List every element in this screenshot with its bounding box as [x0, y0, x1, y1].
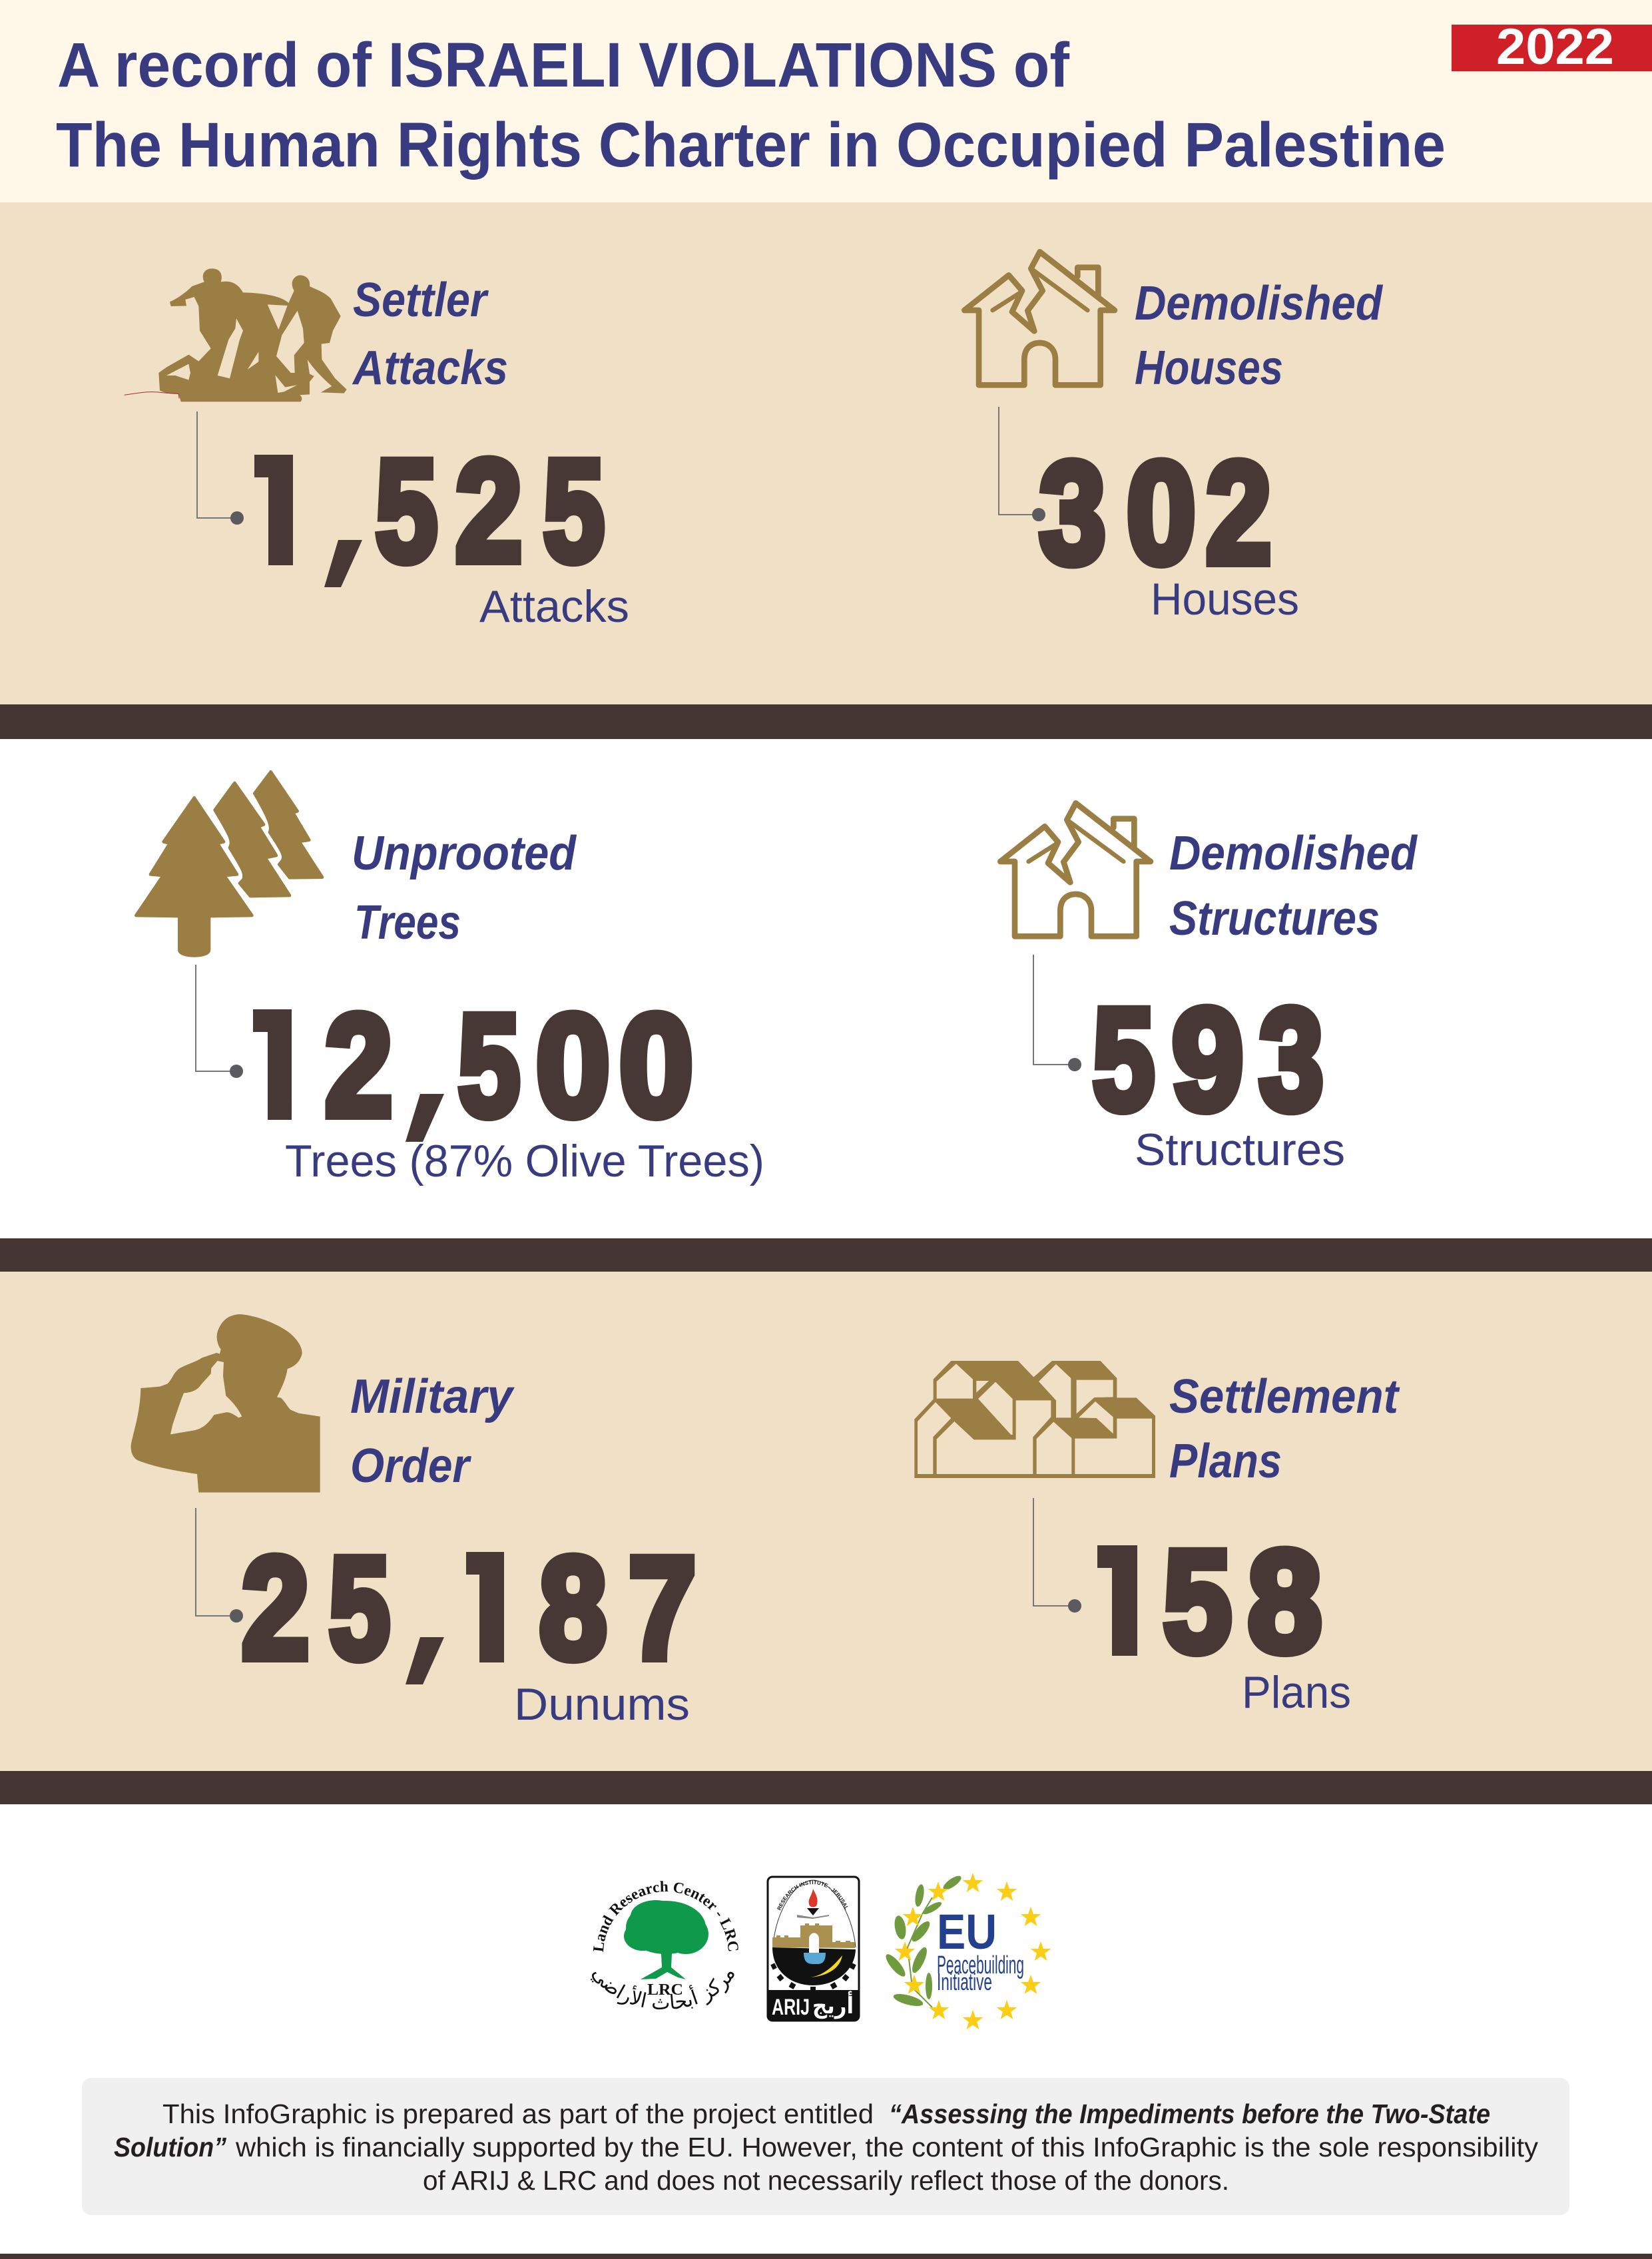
label: Military Order [350, 1370, 515, 1493]
laurel [883, 1874, 964, 2009]
number: attacks: 5 [543, 430, 605, 591]
number: houses [1039, 432, 1271, 594]
number: houses: 0 [1127, 432, 1196, 593]
number: trees [253, 985, 693, 1146]
number: trees: 0 [619, 985, 693, 1146]
disclaimer box: This InfoGraphic is prepared as part of the project entitled [162, 2099, 874, 2129]
number: dunums: , [412, 1595, 432, 1677]
logo: Land Research Center [590, 1881, 738, 2009]
logo: Land Research Center: Land Research Center - LRC [593, 1881, 738, 1952]
logo: Land Research Center: LRC [647, 1981, 683, 1999]
label: Demolished Houses: Houses [1135, 342, 1283, 395]
icon: demolished house [964, 252, 1115, 385]
unit: structures: Structures [1135, 1125, 1345, 1175]
label: Demolished Structures [1169, 827, 1418, 945]
unit: plans: Plans [1242, 1667, 1351, 1718]
gear [772, 1947, 856, 1985]
unit: attacks: Attacks [479, 581, 629, 632]
label: Settlement Plans: Plans [1169, 1435, 1282, 1488]
stars [895, 1873, 1051, 2029]
panel: row 1 [0, 202, 1652, 704]
number: trees: 2 [325, 985, 392, 1146]
number: attacks: 2 [455, 430, 522, 592]
number: dunums: 2 [242, 1528, 309, 1689]
connector [196, 965, 243, 1078]
number: structures [1093, 978, 1324, 1140]
logo: EU Peacebuilding Initiative [883, 1873, 1051, 2029]
number: dunums: 5 [329, 1527, 390, 1688]
logo: ARIJ: APPLIED RESEARCH INSTITUTE - JERUSALEM (ARIJ) [777, 1880, 848, 1911]
disclaimer box: “Assessing the Impediments before the Two-State [889, 2099, 1490, 2129]
icon: demolished structure [1000, 803, 1151, 936]
number: attacks [254, 430, 605, 592]
label: Demolished Houses: Demolished [1135, 277, 1384, 330]
unit: trees: Trees (87% Olive Trees) [285, 1136, 764, 1186]
icon: settlement houses [914, 1361, 1155, 1478]
title [56, 30, 1446, 180]
divider band 3 [0, 1771, 1652, 1804]
castle [772, 1923, 855, 1948]
divider band 1 [0, 704, 1652, 739]
icon: saluting soldier [131, 1314, 320, 1493]
icon: trees [136, 772, 322, 955]
title: The Human Rights Charter in Occupied Palestine [56, 110, 1446, 180]
number: plans: 5 [1163, 1521, 1232, 1682]
number: attacks: , [331, 497, 352, 579]
year badge [1452, 19, 1652, 75]
panel: row 2 [136, 772, 1418, 1186]
number: houses: 2 [1206, 432, 1271, 593]
number: dunums: 7 [629, 1528, 696, 1689]
logo: EU Peacebuilding Initiative: EU [937, 1904, 997, 1959]
wheat [810, 1955, 842, 1977]
title: A record of ISRAELI VIOLATIONS of [57, 30, 1069, 101]
label: Military Order: Order [350, 1439, 472, 1493]
label: Demolished Structures: Structures [1169, 892, 1380, 945]
number: dunums: 1 [478, 1537, 505, 1686]
number: houses: 3 [1039, 433, 1106, 594]
number: structures: 3 [1259, 978, 1324, 1140]
number: dunums: 8 [539, 1528, 607, 1689]
logo: EU Peacebuilding Initiative: Peacebuilding [937, 1951, 1024, 1979]
number: plans: 1 [1111, 1530, 1137, 1679]
number: structures: 5 [1093, 979, 1155, 1140]
label: Military Order: Military [350, 1370, 515, 1423]
number: plans: 8 [1248, 1521, 1322, 1682]
tree [624, 1900, 708, 1979]
number: attacks: 5 [376, 431, 437, 592]
number: trees: 5 [458, 985, 520, 1146]
unit: dunums: Dunums [514, 1679, 690, 1730]
number: plans [1097, 1521, 1322, 1682]
label: Unprooted Trees: Unprooted [352, 827, 577, 880]
logo: ARIJ: ARIJ [772, 1995, 810, 2020]
number: trees: , [412, 1052, 432, 1134]
connector [196, 1508, 243, 1623]
label: Unprooted Trees [352, 827, 577, 949]
label: Settlement Plans [1169, 1370, 1400, 1488]
label: Settler Attacks: Settler [353, 274, 489, 327]
disclaimer box: Solution” [114, 2132, 226, 2162]
year badge: 2022 [1496, 19, 1614, 75]
label: Demolished Houses [1135, 277, 1384, 395]
header panel [0, 0, 1652, 202]
number: attacks: 1 [267, 439, 294, 589]
icon: settler attack silhouettes [125, 268, 347, 401]
panel: row 3 [0, 1272, 1652, 1771]
connector [999, 407, 1045, 521]
number: trees: 0 [536, 985, 610, 1146]
logo: ARIJ [767, 1876, 860, 2021]
label: Demolished Structures: Demolished [1169, 827, 1418, 880]
label: Settlement Plans: Settlement [1169, 1370, 1400, 1423]
label: Unprooted Trees: Trees [354, 896, 461, 949]
logo: Land Research Center: مركز أبحاث الأراضي [590, 1972, 734, 2009]
disclaimer box: of ARIJ & LRC and does not necessarily reflect those of the donors. [423, 2165, 1229, 2196]
divider band 2 [0, 1238, 1652, 1272]
label: Settler Attacks: Attacks [352, 342, 508, 395]
logo: ARIJ: أريج [812, 1991, 854, 2019]
connector [1033, 955, 1081, 1071]
number: dunums [242, 1527, 696, 1689]
number: trees: 1 [266, 994, 293, 1143]
logo: EU Peacebuilding Initiative: Initiative [937, 1968, 992, 1995]
label: Settler Attacks [352, 274, 508, 395]
connector [197, 411, 244, 525]
disclaimer box: which is financially supported by the EU. However, the content of this InfoGraphic is the sole responsibility [235, 2132, 1539, 2162]
unit: houses: Houses [1151, 574, 1299, 625]
bottom band [0, 2254, 1652, 2259]
connector [1033, 1498, 1081, 1613]
number: structures: 9 [1172, 979, 1243, 1140]
flame [809, 1889, 818, 1907]
disclaimer box [82, 2078, 1569, 2215]
